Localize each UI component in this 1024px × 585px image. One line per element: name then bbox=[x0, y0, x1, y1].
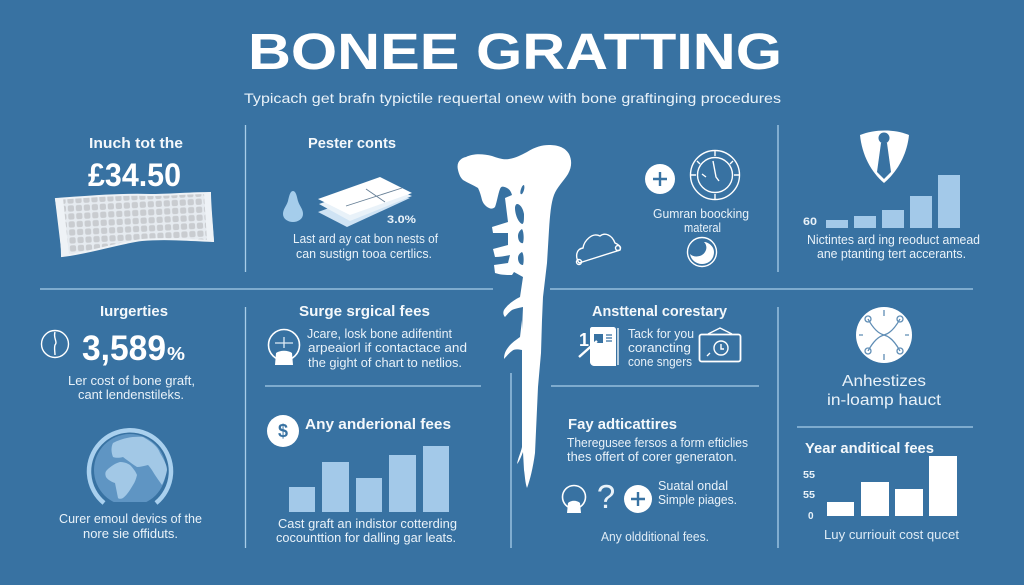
description: Last ard ay cat bon nests of bbox=[293, 232, 438, 246]
panel: top right chart bbox=[803, 130, 980, 261]
icon: dollar bbox=[267, 415, 299, 447]
description: Luy curriouit cost qucet bbox=[824, 528, 960, 542]
description: Theregusee fersos a form efticlies bbox=[567, 436, 748, 450]
description: arpeaiorl if contactace and bbox=[308, 341, 467, 355]
description: cocounttion for dalling gar leats. bbox=[276, 531, 456, 545]
description bbox=[293, 232, 438, 261]
description: Ler cost of bone graft, bbox=[68, 374, 195, 388]
description: Gumran boocking bbox=[653, 207, 749, 221]
panel: pester costs bbox=[283, 135, 438, 261]
heading: Ansttenal corestary bbox=[592, 303, 728, 320]
label: Anhestizes bbox=[842, 373, 926, 390]
icon: dollar: $ bbox=[278, 421, 288, 441]
dividers bbox=[40, 125, 973, 548]
side note: Suatal ondal bbox=[658, 479, 728, 493]
icon: head badge bbox=[268, 330, 300, 365]
percent: % bbox=[167, 344, 185, 364]
description: materal bbox=[684, 221, 721, 235]
axis labels bbox=[803, 470, 815, 522]
description bbox=[59, 512, 202, 541]
heading: Fay adticattires bbox=[568, 416, 677, 433]
description: Cast graft an indistor cotterding bbox=[278, 517, 457, 531]
bar chart bbox=[827, 456, 957, 516]
title: BONEE GRATTING bbox=[248, 23, 782, 80]
label: in-loamp hauct bbox=[827, 392, 942, 409]
icon: document bbox=[579, 327, 618, 366]
axis labels: 55 bbox=[803, 470, 815, 481]
description bbox=[628, 327, 694, 369]
heading: Inuch tot the bbox=[89, 135, 183, 152]
panel: yearly fees chart bbox=[803, 440, 960, 542]
description: Curer emoul devics of the bbox=[59, 512, 202, 526]
icon: plus bbox=[645, 164, 675, 194]
side note bbox=[658, 479, 737, 507]
label bbox=[827, 373, 942, 409]
description: nore sie offiduts. bbox=[83, 527, 178, 541]
description bbox=[307, 327, 467, 370]
panel: surgical fees bbox=[268, 303, 467, 370]
axis labels: 0 bbox=[808, 511, 814, 522]
icon: drop bbox=[283, 191, 303, 222]
panel: fay additives bbox=[562, 416, 748, 544]
icon: bone circle bbox=[42, 330, 68, 358]
panel: gumran booking bbox=[576, 150, 749, 266]
axis labels: 55 bbox=[803, 490, 815, 501]
heading: Year anditical fees bbox=[805, 440, 934, 457]
panel: anesthesia secretary bbox=[579, 303, 740, 369]
panel: anesthesia bbox=[827, 307, 942, 409]
bar chart bbox=[826, 175, 960, 228]
side note: Simple piages. bbox=[658, 493, 737, 507]
icon: head badge bbox=[562, 486, 586, 513]
footer note: Any oldditional fees. bbox=[601, 530, 709, 544]
description: can sustign tooa certlics. bbox=[296, 247, 432, 261]
icon: clock bbox=[690, 150, 740, 200]
description: ane ptanting tert accerants. bbox=[817, 247, 966, 261]
description: Tack for you bbox=[628, 327, 694, 341]
icon: shield with tie bbox=[860, 130, 909, 183]
icon: network circle bbox=[856, 307, 912, 363]
icon: moon dial bbox=[688, 238, 716, 266]
heading: Surge srgical fees bbox=[299, 303, 430, 320]
description: the gight of chart to netlios. bbox=[308, 356, 462, 370]
description: Jcare, losk bone adifentint bbox=[307, 327, 453, 341]
icon: stacked sheets bbox=[318, 177, 412, 227]
heading: Pester conts bbox=[308, 135, 396, 152]
icon: mesh graft bbox=[55, 192, 214, 257]
panel: top left price bbox=[55, 135, 214, 257]
description bbox=[653, 207, 749, 235]
bar chart bbox=[289, 446, 449, 512]
large figure: 3,589 bbox=[82, 329, 166, 368]
heading: Iurgerties bbox=[100, 303, 168, 320]
icon: document: 1 bbox=[579, 330, 589, 350]
subtitle: Typicach get brafn typictile requertal onew with bone graftinging procedures bbox=[244, 90, 781, 106]
description: Nictintes ard ing reoduct amead bbox=[807, 233, 980, 247]
percent label: 3.0% bbox=[387, 214, 416, 226]
icon: plus bbox=[624, 485, 652, 513]
icon: question mark: ? bbox=[597, 478, 615, 515]
description: thes offert of corer generaton. bbox=[567, 450, 737, 464]
icon: globe bbox=[89, 430, 171, 512]
axis label: 60 bbox=[803, 216, 817, 228]
description: corancting bbox=[628, 341, 691, 355]
description: cone sngers bbox=[628, 355, 692, 369]
icon: cloud bbox=[576, 234, 620, 264]
heading: Any anderional fees bbox=[305, 416, 451, 433]
icon: framed clock bbox=[700, 328, 740, 362]
central bone illustration bbox=[458, 145, 571, 488]
description: cant lendenstileks. bbox=[78, 388, 184, 402]
description bbox=[276, 517, 457, 545]
panel: additional fees chart bbox=[267, 415, 457, 545]
description bbox=[807, 233, 980, 261]
panel: surgeries bbox=[42, 303, 202, 541]
price: £34.50 bbox=[88, 157, 181, 193]
description bbox=[68, 374, 195, 402]
description bbox=[567, 436, 748, 464]
